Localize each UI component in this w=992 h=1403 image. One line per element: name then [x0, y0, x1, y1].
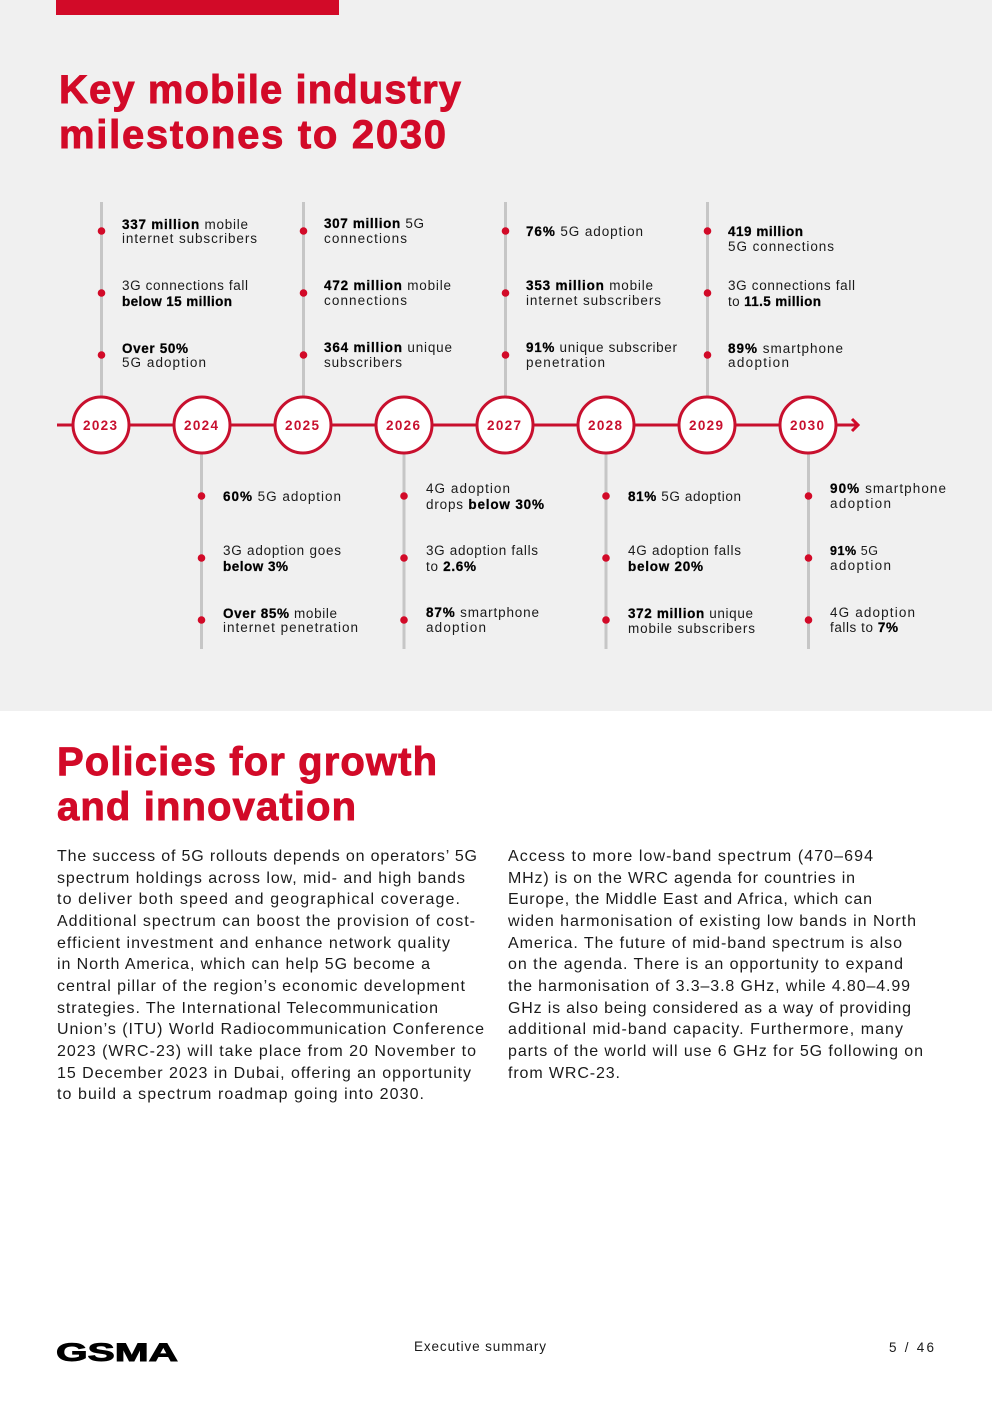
timeline axis arrow: [57, 419, 858, 431]
grey milestones panel: [0, 0, 992, 711]
milestones 2023: Over 50%: [122, 341, 188, 356]
milestones 2023: below 15 million: [122, 294, 232, 309]
body text: right column: the harmonisation of 3.3–3.8 GHz, while 4.80–4.99: [508, 978, 910, 995]
milestones 2028: [602, 489, 755, 636]
footer: page number: 5 / 46: [889, 1340, 934, 1355]
title: key milestones: milestones to 2030: [59, 113, 446, 157]
milestones 2025: 472 million mobile: [324, 278, 451, 293]
heading: policies: Policies for growth: [57, 740, 437, 784]
body text: left column: Union’s (ITU) World Radiocommunication Conference: [57, 1021, 484, 1038]
milestones 2029: to 11.5 million: [728, 294, 821, 309]
milestones 2028: mobile subscribers: [628, 621, 755, 636]
milestones 2030: [805, 481, 946, 635]
heading: policies: and innovation: [57, 785, 356, 829]
body text: left column: The success of 5G rollouts depends on operators’ 5G: [57, 848, 477, 865]
body text: right column: Europe, the Middle East and Africa, which can: [508, 891, 872, 908]
body text: left column: 15 December 2023 in Dubai, offering an opportunity: [57, 1065, 471, 1082]
milestones 2029: 5G connections: [728, 239, 834, 254]
milestones 2024: internet penetration: [223, 620, 358, 635]
year markers: 2025: [285, 418, 319, 433]
footer: section name: Executive summary: [414, 1339, 546, 1354]
body text: right column: additional mid-band capacity. Furthermore, many: [508, 1021, 903, 1038]
milestones 2029: 3G connections fall: [728, 278, 855, 293]
title: key milestones: Key mobile industry: [59, 68, 462, 112]
year markers: 2026: [386, 418, 420, 433]
milestones 2030: 4G adoption: [830, 605, 915, 620]
milestones 2025: subscribers: [324, 355, 402, 370]
milestones 2024: [198, 489, 358, 635]
milestones 2024: 3G adoption goes: [223, 543, 341, 558]
body text: left column: spectrum holdings across low, mid- and high bands: [57, 870, 465, 887]
milestones 2030: 91% 5G: [830, 544, 878, 558]
milestones 2025: connections: [324, 293, 407, 308]
milestones 2029: 89% smartphone: [728, 341, 843, 356]
milestones 2024: 60% 5G adoption: [223, 489, 341, 504]
milestones 2030: 90% smartphone: [830, 481, 946, 496]
timeline connector stems: [102, 202, 808, 649]
milestones 2025: [300, 216, 452, 370]
body text: right column: on the agenda. There is an opportunity to expand: [508, 956, 903, 973]
milestones 2026: drops below 30%: [426, 497, 544, 512]
milestones 2026: 87% smartphone: [426, 605, 539, 620]
year markers: 2027: [487, 418, 521, 433]
year markers: 2023: [83, 418, 117, 433]
milestones 2026: [400, 481, 544, 635]
milestones 2023: 337 million mobile: [122, 217, 248, 232]
milestones 2023: 3G connections fall: [122, 278, 248, 293]
milestones 2030: adoption: [830, 496, 891, 511]
body text: left column: [57, 848, 484, 1103]
milestones 2027: [502, 224, 678, 370]
milestones 2028: below 20%: [628, 559, 703, 574]
milestones 2028: 4G adoption falls: [628, 543, 741, 558]
milestones 2024: Over 85% mobile: [223, 606, 337, 621]
body text: right column: America. The future of mid-band spectrum is also: [508, 935, 902, 952]
milestones 2023: 5G adoption: [122, 355, 206, 370]
year markers: [73, 397, 836, 453]
logo: GSMA: GSMA: [56, 1339, 178, 1367]
milestones 2027: 353 million mobile: [526, 278, 653, 293]
body text: right column: [507, 848, 923, 1082]
body text: right column: from WRC-23.: [508, 1065, 620, 1082]
milestones 2025: 364 million unique: [324, 340, 452, 355]
body text: right column: GHz is also being considered as a way of providing: [508, 1000, 911, 1017]
milestones 2027: 76% 5G adoption: [526, 224, 643, 239]
milestones 2027: penetration: [526, 355, 605, 370]
milestones 2026: 4G adoption: [426, 481, 510, 496]
body text: left column: Additional spectrum can boost the provision of cost-: [57, 913, 475, 930]
body text: right column: parts of the world will use 6 GHz for 5G following on: [508, 1043, 923, 1060]
year markers: 2029: [689, 418, 723, 433]
milestones 2027: internet subscribers: [526, 293, 661, 308]
body text: left column: 2023 (WRC-23) will take place from 20 November to: [57, 1043, 476, 1060]
milestones 2029: [704, 224, 855, 370]
milestones 2030: falls to 7%: [830, 620, 898, 635]
body text: left column: to deliver both speed and geographical coverage.: [57, 891, 460, 908]
milestones 2024: below 3%: [223, 559, 288, 574]
body text: left column: to build a spectrum roadmap going into 2030.: [57, 1086, 424, 1103]
year markers: 2030: [790, 418, 824, 433]
body text: right column: Access to more low-band spectrum (470–694: [508, 848, 873, 865]
milestones 2026: adoption: [426, 620, 486, 635]
milestones 2028: 372 million unique: [628, 606, 753, 621]
body text: left column: in North America, which can help 5G become a: [57, 956, 430, 973]
heading: policies: [57, 740, 437, 829]
milestones 2023: internet subscribers: [122, 231, 257, 246]
milestones 2026: 3G adoption falls: [426, 543, 538, 558]
body text: left column: efficient investment and enhance network quality: [57, 935, 450, 952]
body text: left column: central pillar of the region’s economic development: [57, 978, 466, 995]
milestones 2026: to 2.6%: [426, 559, 476, 574]
milestones 2023: [98, 217, 257, 370]
milestones 2028: 81% 5G adoption: [628, 489, 741, 504]
body text: right column: MHz) is on the WRC agenda for countries in: [508, 870, 855, 887]
title: key milestones: [59, 68, 462, 157]
body text: right column: widen harmonisation of existing low bands in North: [507, 913, 916, 930]
milestones 2029: 419 million: [728, 224, 803, 239]
milestones 2027: 91% unique subscriber: [526, 340, 678, 355]
year markers: 2028: [588, 418, 622, 433]
milestones 2029: adoption: [728, 355, 789, 370]
year markers: 2024: [184, 418, 218, 433]
milestones 2025: 307 million 5G: [324, 216, 424, 231]
milestones 2025: connections: [324, 231, 407, 246]
milestones 2030: adoption: [830, 558, 891, 573]
body text: left column: strategies. The International Telecommunication: [57, 1000, 438, 1017]
